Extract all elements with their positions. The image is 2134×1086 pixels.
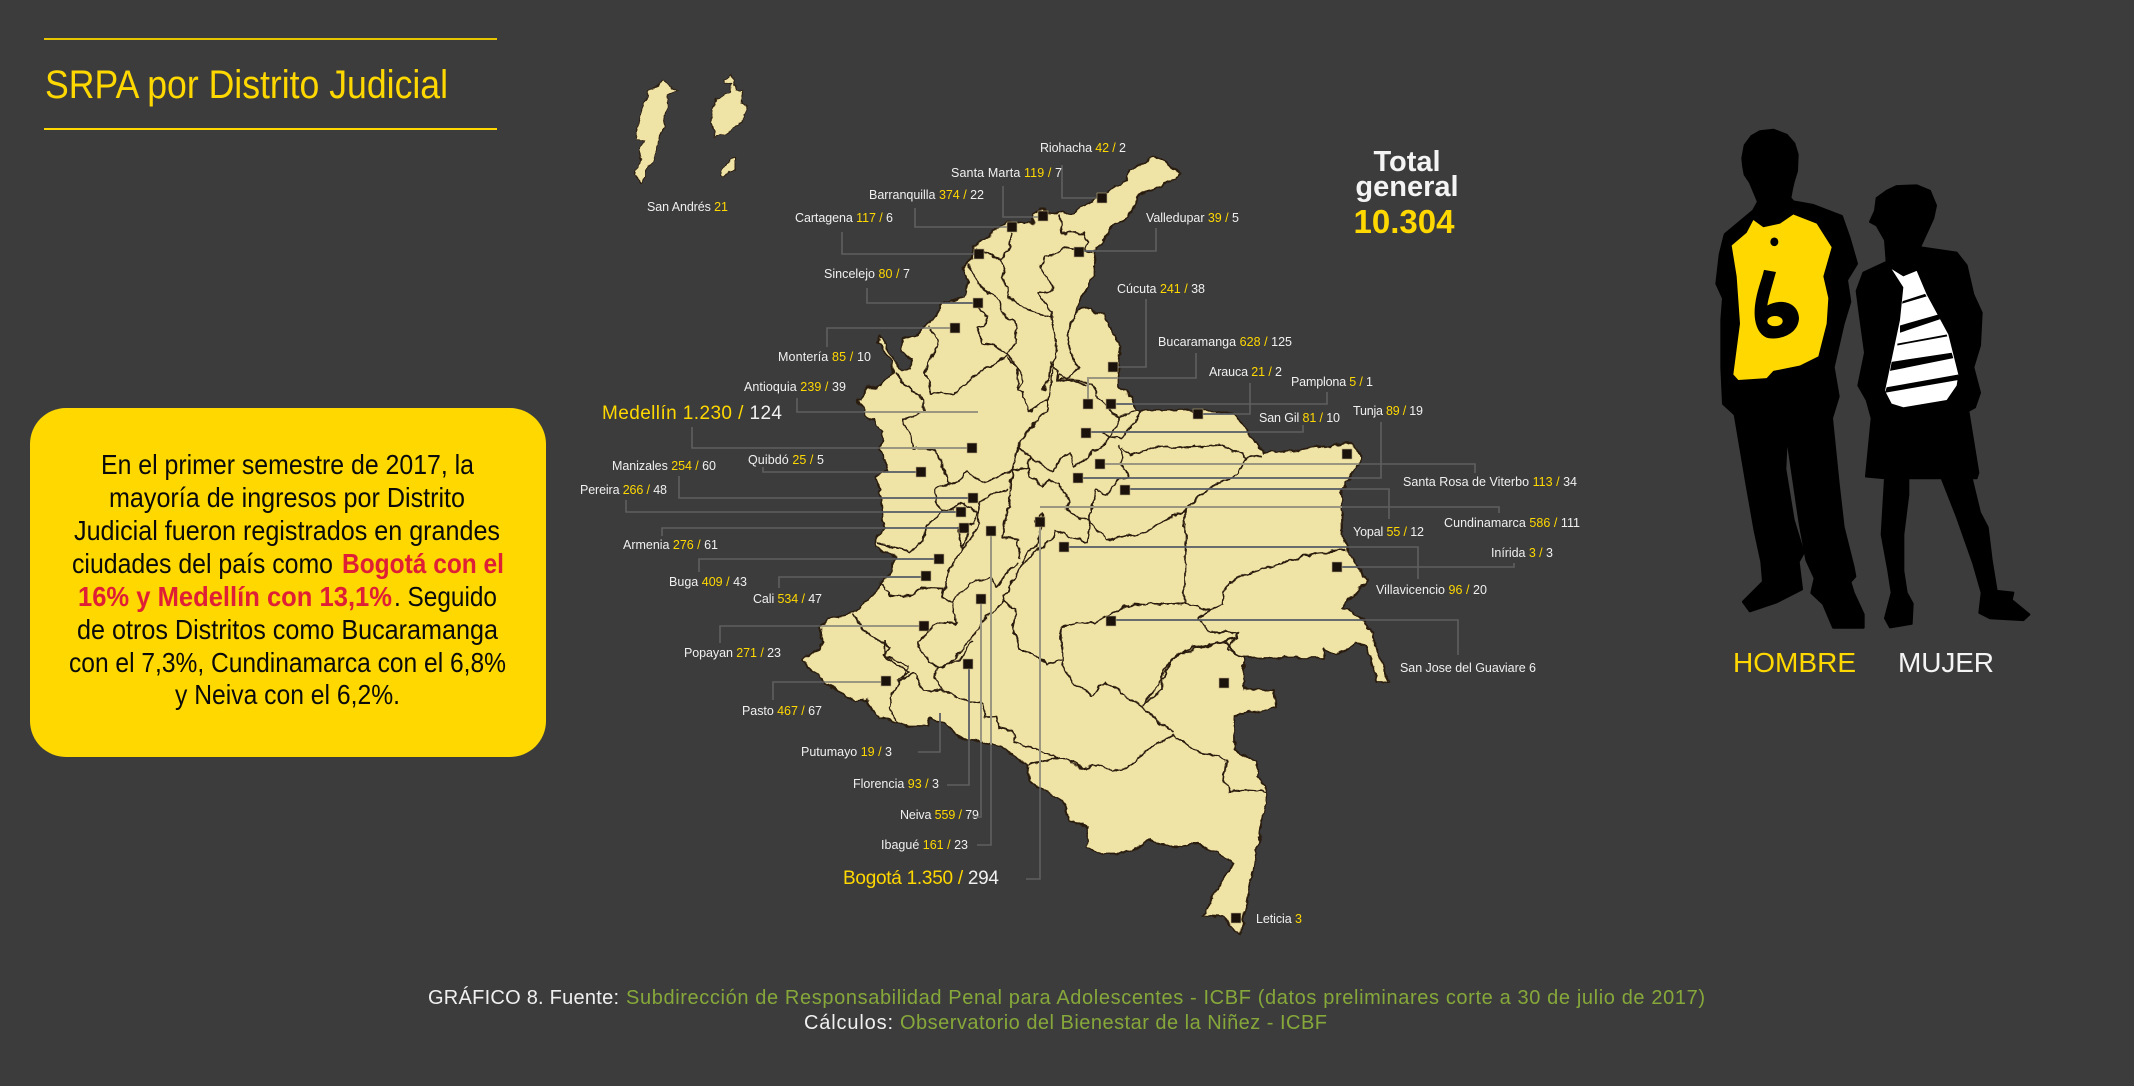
- figure: girl silhouette: [1857, 185, 2029, 627]
- callout: main finding: 16% y Medellín con 13,1%: [78, 581, 392, 612]
- callout: main finding: mayoría de ingresos por Distrito: [109, 482, 465, 513]
- label: Yopal: [1125, 489, 1424, 539]
- label: Villavicencio: Villavicencio 96 / 20: [1376, 583, 1487, 597]
- callout: main finding: de otros Distritos como Bucaramanga: [77, 614, 498, 645]
- label: Ibagué: Ibagué 161 / 23: [881, 838, 968, 852]
- label: Valledupar: [1079, 211, 1239, 251]
- label: Valledupar: Valledupar 39 / 5: [1146, 211, 1239, 225]
- label: Bucaramanga: [1088, 335, 1292, 404]
- label: Pereira: [580, 483, 961, 512]
- label: Pamplona: [1111, 375, 1373, 404]
- label: Armenia: Armenia 276 / 61: [623, 538, 718, 552]
- callout: main finding: Judicial fueron registrados en grandes: [74, 515, 500, 546]
- callout: main finding: ciudades del país como: [72, 548, 333, 579]
- label: Antioquia: Antioquia 239 / 39: [744, 380, 846, 394]
- label: Buga: Buga 409 / 43: [669, 575, 747, 589]
- label: Cúcuta: Cúcuta 241 / 38: [1117, 282, 1205, 296]
- label: Barranquilla: Barranquilla 374 / 22: [869, 188, 984, 202]
- shirt: [1732, 215, 1832, 380]
- label: Buga: [669, 559, 939, 589]
- source note: [428, 986, 1705, 1034]
- label: Sincelejo: Sincelejo 80 / 7: [824, 267, 910, 281]
- label: Neiva: Neiva 559 / 79: [900, 808, 979, 822]
- label: Cali: Cali 534 / 47: [753, 592, 822, 606]
- legend: mujer: MUJER: [1898, 647, 1994, 678]
- title: SRPA por Distrito Judicial: [45, 63, 448, 107]
- label: Manizales: Manizales 254 / 60: [612, 459, 716, 473]
- label: Sincelejo: [824, 267, 978, 303]
- label: Cartagena: [795, 211, 979, 254]
- label: Bogotá: Bogotá 1.350 / 294: [843, 868, 999, 889]
- label: Florencia: Florencia 93 / 3: [853, 777, 939, 791]
- label: Santa Marta: [951, 166, 1062, 217]
- label: Putumayo: [801, 713, 940, 759]
- striped shirt: [1885, 269, 1958, 407]
- legend: hombre: HOMBRE: [1733, 647, 1856, 678]
- label: Arauca: [1198, 365, 1282, 414]
- label: Cúcuta: [1114, 282, 1205, 367]
- callout: main finding: Bogotá con el: [342, 548, 504, 579]
- label: Medellín: Medellín 1.230 / 124: [602, 403, 782, 424]
- label: Barranquilla: [869, 188, 1012, 227]
- label: Quibdó: [748, 453, 921, 472]
- label: Antioquia: [744, 380, 978, 412]
- label: Pamplona: Pamplona 5 / 1: [1291, 375, 1373, 389]
- total general: [1354, 146, 1459, 240]
- map: San Andrés islands: [635, 75, 748, 183]
- callout: main finding: [30, 408, 546, 757]
- label: Putumayo: Putumayo 19 / 3: [801, 745, 892, 759]
- city markers: [881, 193, 1352, 923]
- callout: main finding: y Neiva con el 6,2%.: [175, 679, 400, 710]
- label: Riohacha: Riohacha 42 / 2: [1040, 141, 1126, 155]
- label: Ibagué: [881, 531, 991, 852]
- label: San José del Guaviare: [1111, 620, 1536, 675]
- label: Neiva: [900, 599, 981, 822]
- figure: boy silhouette: [1717, 130, 1863, 627]
- label: Bucaramanga: Bucaramanga 628 / 125: [1158, 335, 1292, 349]
- label: Cundinamarca: [1040, 507, 1580, 530]
- label: San Gil: [1086, 411, 1340, 432]
- label: Santa Marta: Santa Marta 119 / 7: [951, 166, 1062, 180]
- label: Montería: [778, 328, 955, 364]
- source note: GRÁFICO 8. Fuente:: [428, 986, 619, 1009]
- callout: main finding: En el primer semestre de 2017, la: [101, 449, 474, 480]
- total general: general: [1355, 171, 1459, 203]
- label: Armenia: [623, 528, 964, 552]
- label: Popayán: [684, 626, 924, 660]
- label: Inírida: Inírida 3 / 3: [1491, 546, 1553, 560]
- total general: Total: [1373, 146, 1441, 178]
- source note: Subdirección de Responsabilidad Penal para Adolescentes - ICBF (datos preliminares corte a 30 de julio de 2017): [626, 987, 1705, 1009]
- label: Cali: [753, 577, 926, 606]
- label: Quibdó: Quibdó 25 / 5: [748, 453, 824, 467]
- label: Pereira: Pereira 266 / 48: [580, 483, 667, 497]
- label: Pasto: Pasto 467 / 67: [742, 704, 822, 718]
- label: Santa Rosa de Viterbo: [1100, 464, 1577, 489]
- label: Arauca: Arauca 21 / 2: [1209, 365, 1282, 379]
- label: Cartagena: Cartagena 117 / 6: [795, 211, 893, 225]
- city labels and leader lines: [580, 141, 1580, 926]
- source note: Observatorio del Bienestar de la Niñez - ICBF: [900, 1012, 1327, 1034]
- label: Popayán: Popayan 271 / 23: [684, 646, 781, 660]
- callout: main finding: . Seguido: [394, 581, 497, 612]
- leader lines over the map: [820, 198, 1364, 788]
- label: Leticia: Leticia 3: [1256, 912, 1302, 926]
- label: San Gil: San Gil 81 / 10: [1259, 411, 1340, 425]
- label: Cundinamarca: Cundinamarca 586 / 111: [1444, 516, 1580, 530]
- label: Pasto: [742, 682, 886, 718]
- label: Tunja: Tunja 89 / 19: [1353, 404, 1423, 418]
- label: Yopal: Yopal 55 / 12: [1353, 525, 1424, 539]
- total general: 10.304: [1354, 203, 1455, 240]
- label: Florencia: [853, 665, 969, 791]
- label: Inírida: [1337, 546, 1553, 567]
- label: Tunja: [1078, 404, 1423, 478]
- label: Riohacha: [1040, 141, 1126, 198]
- map: Colombia judicial districts: [802, 157, 1389, 935]
- callout: main finding: con el 7,3%, Cundinamarca con el 6,8%: [69, 647, 506, 678]
- label: Medellín: [602, 403, 972, 448]
- label: San Andrés: San Andrés 21: [647, 200, 728, 214]
- label: Manizales: [612, 459, 973, 498]
- source note: Cálculos:: [804, 1012, 893, 1034]
- label: Santa Rosa de Viterbo: Santa Rosa de Viterbo 113 / 34: [1403, 475, 1577, 489]
- label: Montería: Montería 85 / 10: [778, 350, 871, 364]
- label: Bogotá: [843, 522, 1040, 889]
- label: Villavicencio: [1064, 547, 1487, 597]
- label: San José del Guaviare: San Jose del Guaviare 6: [1400, 661, 1536, 675]
